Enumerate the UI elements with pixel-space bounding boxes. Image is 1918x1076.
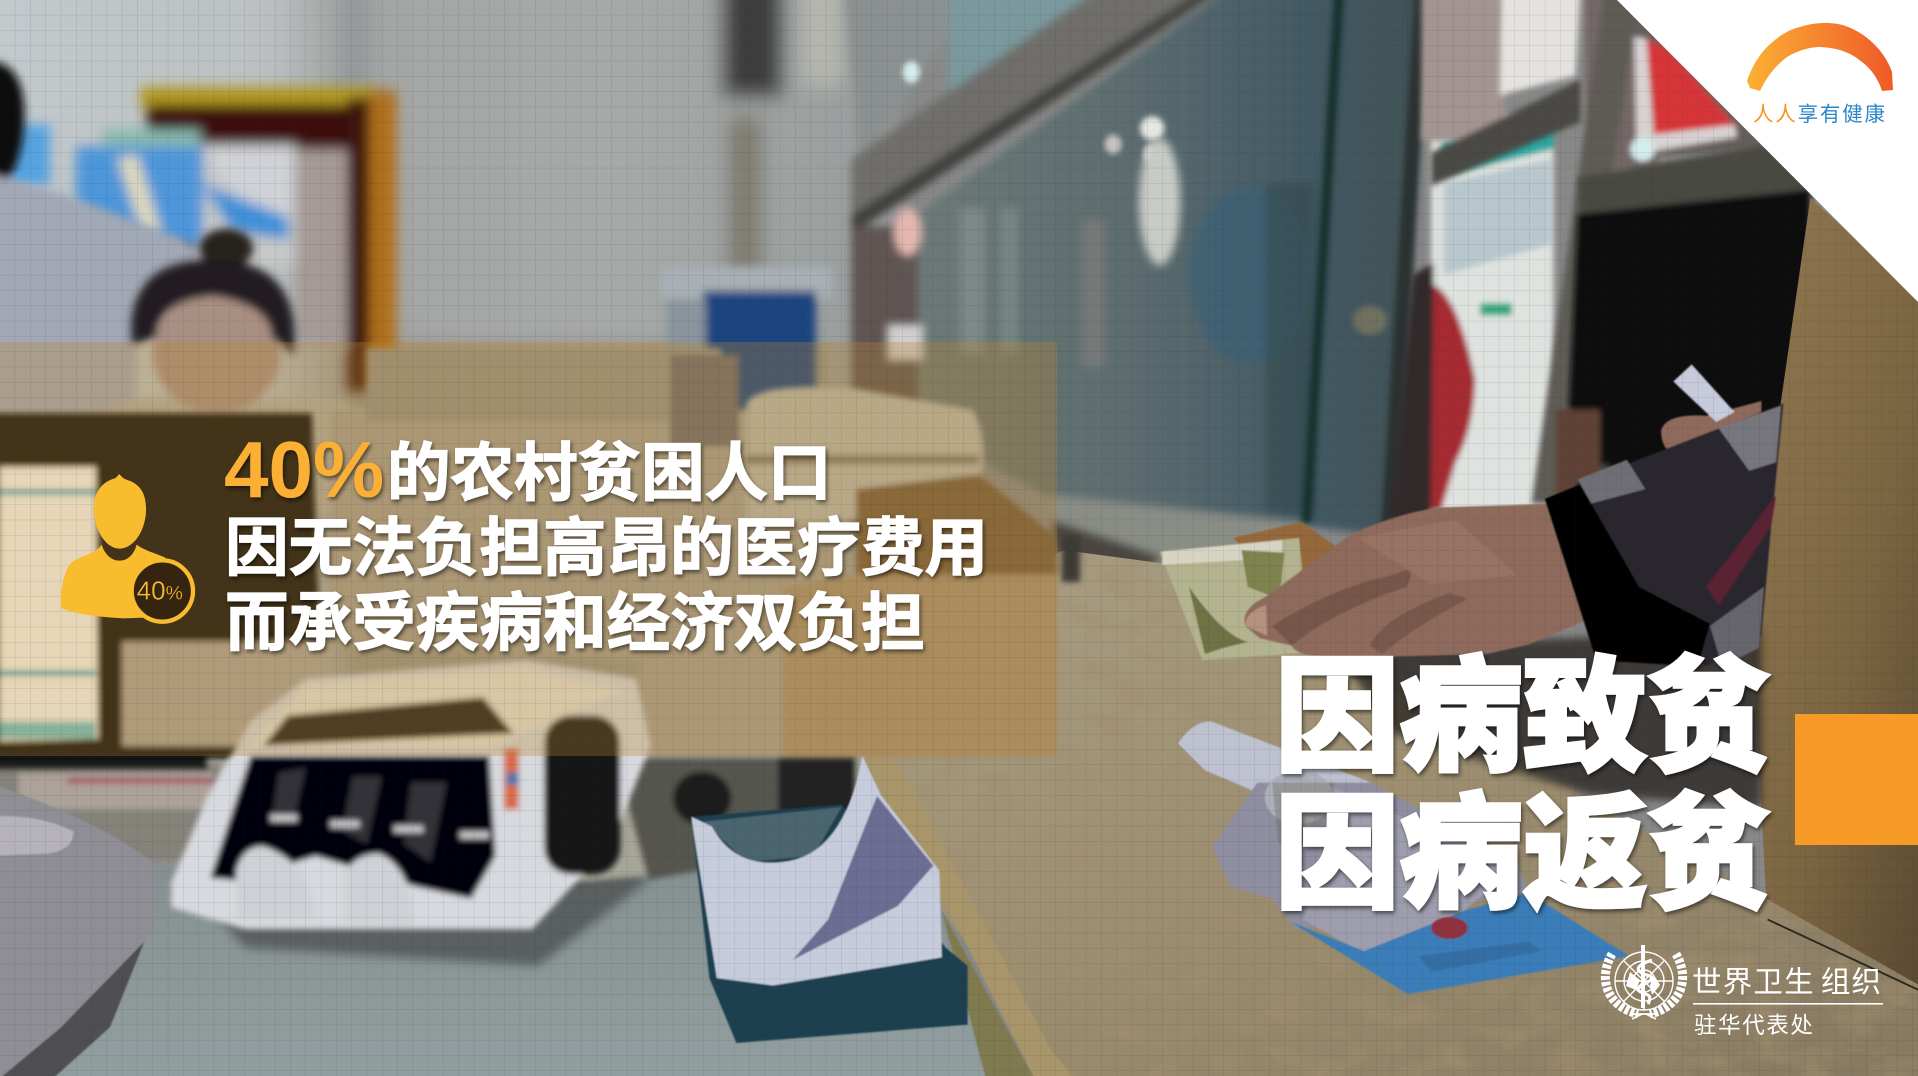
dark service window xyxy=(1556,137,1810,514)
blue medical card xyxy=(1290,893,1629,994)
head xyxy=(94,474,146,549)
shadow behind title xyxy=(1333,630,1761,807)
banner and poster xyxy=(6,87,396,391)
door frame xyxy=(1306,0,1423,528)
banknote counting machine xyxy=(171,660,651,929)
cloth at lower left xyxy=(0,783,157,1076)
rolled receipt paper xyxy=(1178,721,1529,954)
shoulders xyxy=(61,545,173,618)
white corner triangle xyxy=(1617,0,1918,302)
title line one: 因病致贫 xyxy=(1275,616,1771,796)
title line two: 因病返贫 xyxy=(1275,753,1771,933)
callout text xyxy=(224,422,988,664)
basket of paper xyxy=(691,756,968,1043)
cardboard shield xyxy=(1752,198,1918,998)
money xyxy=(1160,522,1338,660)
ticket and second hand xyxy=(1661,364,1761,455)
man at left xyxy=(0,61,198,416)
upper-right window frame and signs xyxy=(1421,0,1810,504)
organisation name: 世界卫生组织 xyxy=(1692,959,1882,1001)
logo: health for all xyxy=(1747,23,1893,127)
badge value: 40% xyxy=(137,576,183,606)
counter top xyxy=(783,550,1918,1076)
floor and under-counter space xyxy=(0,734,997,1076)
woman cashier xyxy=(86,229,404,514)
monitor and desk xyxy=(0,348,1080,758)
person icon with 40% badge xyxy=(61,474,193,622)
logo text: 人人享有健康 xyxy=(1753,97,1887,127)
logo arc xyxy=(1747,23,1893,91)
orange accent block xyxy=(1795,714,1918,845)
WHO logo and office name xyxy=(1605,945,1883,1040)
line one: 的农村贫困人口 xyxy=(387,422,832,514)
line three: 而承受疾病和经济双负担 xyxy=(225,572,925,664)
office name: 驻华代表处 xyxy=(1694,1008,1815,1040)
glass light flares xyxy=(887,61,1180,361)
red-coated person and bright doorway xyxy=(1388,116,1553,526)
back wall xyxy=(0,0,893,917)
cardboard lower corner line xyxy=(1768,919,1918,997)
40% highlight: 40% xyxy=(224,425,384,514)
window beam and upper glass xyxy=(844,0,1235,532)
blue cabinet xyxy=(661,267,832,425)
translucent amber band xyxy=(0,342,1057,756)
line two: 因无法负担高昂的医疗费用 xyxy=(225,497,988,589)
hand holding money xyxy=(1244,504,1596,658)
WHO emblem xyxy=(1605,945,1683,1019)
checkered sleeve xyxy=(1545,403,1783,666)
counter front edge xyxy=(856,734,1083,1076)
glass panel xyxy=(917,0,1425,584)
main title xyxy=(1275,616,1771,933)
badge xyxy=(132,560,193,622)
